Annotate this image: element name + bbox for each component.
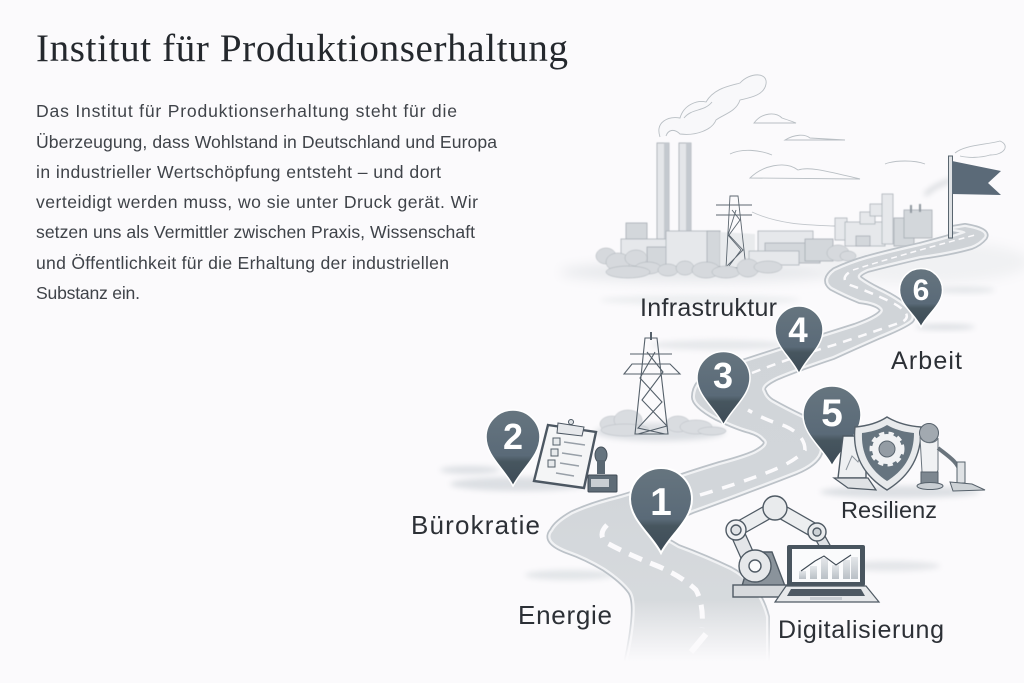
- title: Institut für Produktionserhaltung: [36, 27, 568, 70]
- text block: introduction: in industrieller Wertschöpfung entsteht – und dort: [36, 162, 441, 182]
- text block: introduction: Substanz ein.: [36, 283, 140, 303]
- road: [550, 227, 985, 683]
- pin 3: [697, 352, 750, 425]
- pin 1: [630, 468, 692, 553]
- label: Infrastruktur: Infrastruktur: [640, 294, 777, 322]
- clouds and smoke: [659, 75, 1005, 195]
- bushes near factory: [596, 245, 856, 278]
- label: Arbeit: Arbeit: [891, 347, 962, 375]
- pin 4: 4: [788, 311, 808, 350]
- icon: clipboard and stamp: [534, 420, 617, 492]
- icon: right factory group: [835, 194, 932, 246]
- text block: introduction: Überzeugung, dass Wohlstand in Deutschland und Europa: [36, 132, 497, 152]
- icon: factory with chimneys: [621, 143, 833, 269]
- icon: distant power pylon: [716, 196, 835, 268]
- pin 3: 3: [713, 355, 733, 396]
- label: Resilienz: Resilienz: [841, 497, 937, 523]
- label: Bürokratie: Bürokratie: [411, 510, 540, 540]
- icon: laptop with chart: [775, 545, 879, 602]
- pin 6: [900, 268, 942, 327]
- text block: introduction: Das Institut für Produktionserhaltung steht für die: [36, 101, 457, 121]
- label: Energie: Energie: [518, 600, 612, 630]
- text block: introduction: setzen uns als Vermittler zwischen Praxis, Wissenschaft: [36, 222, 475, 242]
- pin 5: 5: [821, 392, 843, 435]
- bushes near pylon: [600, 410, 726, 436]
- ground shading: [440, 240, 1024, 580]
- bottom mask: [530, 661, 800, 683]
- pin 2: [486, 410, 540, 486]
- icon: resilience shield, laptop and robot: [834, 417, 985, 491]
- text block: introduction: und Öffentlichkeit für die Erhaltung der industriellen: [36, 253, 449, 273]
- flag: [948, 156, 1001, 238]
- pin 6: 6: [913, 274, 929, 307]
- pin 4: [775, 306, 823, 374]
- bottom fade: [530, 600, 800, 662]
- text block: introduction: [36, 101, 497, 303]
- icon: robot arm: [726, 496, 826, 597]
- text block: introduction: verteidigt werden muss, wo sie unter Druck gerät. Wir: [36, 192, 478, 212]
- pin 1: 1: [650, 481, 672, 524]
- pin 2: 2: [503, 416, 523, 457]
- icon: power pylon: [624, 332, 680, 434]
- label: Digitalisierung: Digitalisierung: [778, 616, 944, 644]
- pin 5: [803, 386, 861, 466]
